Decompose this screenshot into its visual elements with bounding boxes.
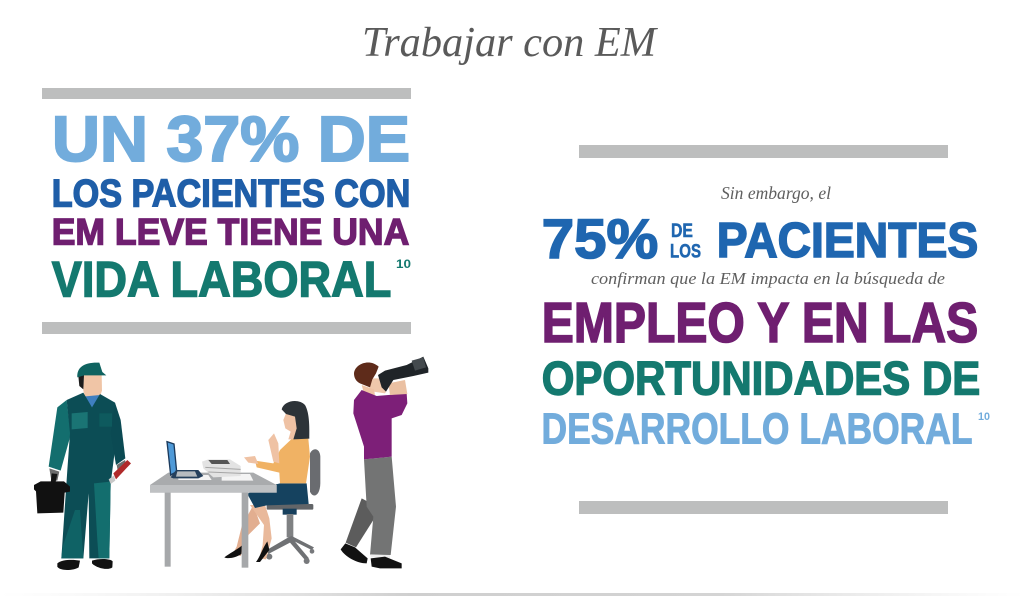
icon: laptop xyxy=(167,442,203,478)
icon: woman xyxy=(224,401,310,562)
stat headline: 75%: 75% xyxy=(542,207,658,270)
illustration: photographer xyxy=(341,357,428,568)
bottom rule xyxy=(0,593,1024,596)
text: los: LOS xyxy=(670,242,701,262)
title: Trabajar con EM xyxy=(362,20,658,66)
panel: 75% statistic xyxy=(542,145,990,514)
illustration: desk and office worker xyxy=(150,401,320,568)
text: vida laboral: VIDA LABORAL xyxy=(52,251,391,307)
icon: chair xyxy=(266,449,320,564)
stat headline: 37%: UN 37% DE xyxy=(52,103,410,175)
reference mark: 10 xyxy=(396,257,411,271)
text: confirman: confirman que la EM impacta en la búsqueda de xyxy=(591,269,945,288)
text: sin embargo: Sin embargo, el xyxy=(721,183,831,203)
panel: 37% statistic xyxy=(42,88,411,334)
text: EM leve tiene una: EM LEVE TIENE UNA xyxy=(52,211,409,252)
text: pacientes: PACIENTES xyxy=(717,213,978,268)
icon: paper stacks xyxy=(202,459,241,477)
text: los pacientes con: LOS PACIENTES CON xyxy=(52,172,410,215)
reference mark: 10 xyxy=(978,411,990,423)
text: oportunidades de: OPORTUNIDADES DE xyxy=(542,351,980,404)
illustration: mechanic xyxy=(34,363,131,570)
text: de: DE xyxy=(671,221,693,242)
icon: desk xyxy=(150,473,277,568)
